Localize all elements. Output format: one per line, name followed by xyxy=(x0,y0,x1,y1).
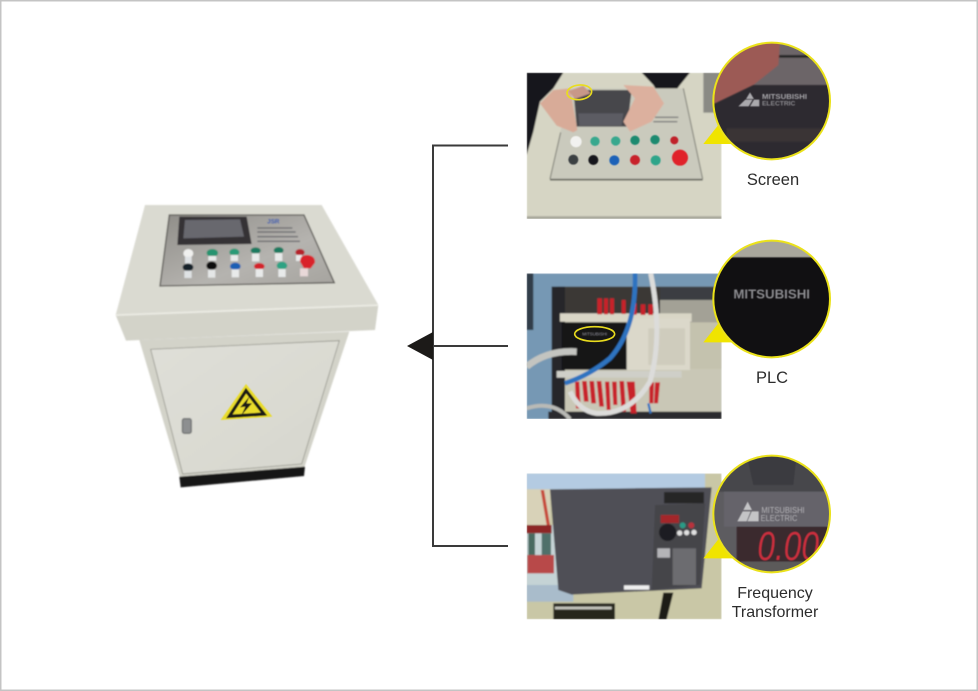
control cabinet illustration xyxy=(116,205,378,487)
logo text: MITSUBISHI xyxy=(733,287,810,301)
label: Frequency Transformer: Transformer xyxy=(732,604,819,621)
panel: PLC xyxy=(527,240,833,419)
yellow highlight ring xyxy=(575,327,615,341)
door lock xyxy=(182,419,191,433)
panel buttons xyxy=(183,247,315,278)
pointer arrow to cabinet xyxy=(407,332,433,360)
photo: frequency transformer unit xyxy=(527,473,722,619)
warning sign xyxy=(221,384,272,420)
label: Frequency Transformer: Frequency xyxy=(737,585,813,602)
red digital display: 0.00 xyxy=(757,523,819,569)
photo: PLC in wiring cabinet xyxy=(527,273,722,419)
cabinet top face xyxy=(116,205,378,315)
magnified circle: Mitsubishi PLC logo xyxy=(710,240,833,358)
steel control panel xyxy=(160,215,334,286)
logo mark xyxy=(738,92,759,106)
magnified circle: Mitsubishi inverter display: ELECTRIC xyxy=(761,513,797,523)
panel logo: JSR xyxy=(267,218,280,225)
label: PLC: PLC xyxy=(756,369,788,387)
logo text: MITSUBISHI xyxy=(762,92,807,101)
magnified circle: Mitsubishi inverter display xyxy=(710,455,834,573)
magnified circle: Mitsubishi screen logo xyxy=(710,42,833,160)
callout pointer xyxy=(703,125,733,144)
PLC label text: MITSUBISHI xyxy=(582,332,607,337)
panel text lines xyxy=(257,227,300,242)
logo mark xyxy=(737,502,759,521)
connector bracket xyxy=(433,146,508,546)
logo text: MITSUBISHI xyxy=(761,505,805,515)
photo: operator hands on control panel xyxy=(527,73,722,219)
panel: screen xyxy=(527,42,833,219)
panel: frequency transformer xyxy=(527,455,834,619)
magnified circle: Mitsubishi screen logo: ELECTRIC xyxy=(762,100,796,107)
panel screen xyxy=(177,217,252,245)
cabinet base xyxy=(179,467,305,487)
label: Screen: Screen xyxy=(747,171,799,189)
yellow highlight ring xyxy=(566,84,592,101)
cabinet body xyxy=(139,332,349,477)
callout pointer xyxy=(703,323,733,342)
cabinet door xyxy=(151,341,339,474)
callout pointer xyxy=(703,539,733,558)
cabinet lid front edge xyxy=(116,305,378,341)
